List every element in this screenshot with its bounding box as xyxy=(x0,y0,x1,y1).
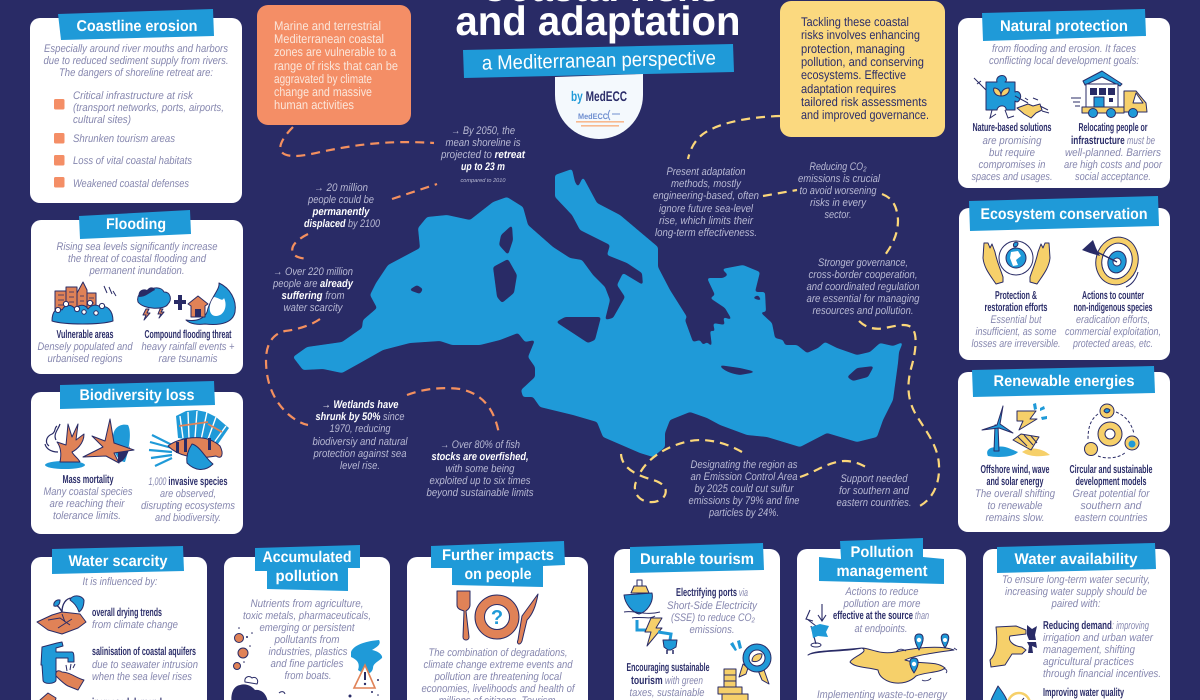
panel: water scarcity: It is influenced by: xyxy=(82,576,158,588)
dashed connectors: adaptation xyxy=(621,116,939,507)
panel: flooding: urbanised regions xyxy=(48,353,123,365)
annotation: support needed: for southern and xyxy=(839,485,910,497)
icon: wind, solar and bolt xyxy=(982,403,1050,457)
annotation: emission control area: by 2025 could cut sulfur xyxy=(694,483,795,495)
annotation: reducing CO2: emissions is crucial xyxy=(798,173,880,185)
annotation: water scarcity: → Over 220 million xyxy=(273,266,353,278)
icon: pollutant particles xyxy=(234,627,258,684)
panel: ecosystem conservation xyxy=(959,196,1170,360)
annotation: shoreline retreat xyxy=(440,125,526,184)
panel: water availability: Reducing demand: improving xyxy=(1043,620,1150,632)
panel: pollution management xyxy=(797,538,966,700)
annotation: wetlands: shrunk by 50% since xyxy=(316,411,404,423)
panel: ecosystem conservation: eradication efforts, xyxy=(1076,314,1150,326)
panel: accumulated pollution: pollutants from xyxy=(274,634,340,646)
intro box: risks: range of risks that can be xyxy=(274,59,398,73)
panel: water scarcity: Water scarcity xyxy=(68,553,168,570)
intro box: risks: aggravated by climate xyxy=(274,72,372,86)
panel: water availability: To ensure long-term water security, xyxy=(1002,574,1150,586)
panel: coastline erosion: Coastline erosion xyxy=(76,18,198,35)
panel: coastline erosion: Critical infrastructure at risk xyxy=(73,90,193,102)
byline badge: MedECC xyxy=(555,74,643,139)
annotation: governance xyxy=(806,257,920,317)
annotation: displaced people: people could be xyxy=(307,194,374,206)
map: Mediterranean sea xyxy=(293,169,903,457)
panel: water availability xyxy=(983,543,1170,700)
panel: natural protection: Nature-based solutions xyxy=(972,122,1052,134)
annotation: displaced people: → 20 million xyxy=(314,182,368,194)
panel: durable tourism: Short-Side Electricity xyxy=(667,600,758,612)
icon: eco medal and coins xyxy=(718,640,771,700)
intro box: adaptation: ecosystems. Effective xyxy=(801,68,906,82)
icon: compound flooding xyxy=(138,283,235,324)
panel: further impacts on people: The combination of degradations, xyxy=(428,647,568,659)
annotation: wetlands: level rise. xyxy=(340,460,380,472)
panel: coastline erosion: The dangers of shoreline retreat are: xyxy=(59,67,213,79)
annotation: support needed: Support needed xyxy=(840,473,908,485)
panel: water availability: Water availability xyxy=(1014,551,1138,568)
intro box: risks: Mediterranean coastal xyxy=(274,32,384,46)
panel: natural protection: Natural protection xyxy=(1000,18,1128,35)
icon: coral and starfish xyxy=(45,419,134,469)
panel: renewable energies: development models xyxy=(1076,476,1146,488)
panel: natural protection: are promising xyxy=(982,135,1042,147)
icon: plate, fork and knife xyxy=(457,591,538,644)
intro box: adaptation xyxy=(780,1,945,137)
intro box: adaptation: adaptation requires xyxy=(801,82,896,96)
panel: ecosystem conservation: insufficient, as some xyxy=(976,326,1056,338)
annotation: water scarcity xyxy=(272,266,354,314)
annotation: present adaptation: methods, mostly xyxy=(671,178,742,190)
intro box: risks xyxy=(257,5,411,125)
panel: coastline erosion: Weakened coastal defenses xyxy=(73,178,189,190)
annotation: fish stocks: with some being xyxy=(446,463,515,475)
panel: flooding: Compound flooding threat xyxy=(144,329,232,341)
panel: biodiversity loss: 1,000 invasive species xyxy=(148,476,228,488)
annotation: reducing CO2: to avoid worsening xyxy=(800,185,877,197)
panel: ecosystem conservation: Protection & xyxy=(995,290,1037,302)
icon: city crowd xyxy=(52,282,116,324)
panel: renewable energies: Circular and sustainable xyxy=(1070,464,1152,476)
annotation: fish stocks: beyond sustainable limits xyxy=(426,487,534,499)
icon: circular economy xyxy=(1084,404,1139,458)
annotation: reducing CO2 xyxy=(798,161,880,221)
annotation: wetlands: → Wetlands have xyxy=(322,399,398,411)
annotation: fish stocks: stocks are overfished, xyxy=(432,451,528,463)
annotation: water scarcity: people are already xyxy=(272,278,354,290)
panel: water scarcity: due to seawater intrusion xyxy=(92,659,198,671)
annotation: displaced people: displaced by 2100 xyxy=(304,218,381,230)
byline badge: MedECC: MedECC xyxy=(578,112,608,121)
panel: further impacts on people: Further impacts xyxy=(442,547,554,564)
panel: pollution management: Actions to reduce xyxy=(845,586,918,598)
panel: ecosystem conservation: losses are irreversible. xyxy=(972,338,1060,350)
panel: durable tourism: Durable tourism xyxy=(640,551,754,568)
dashed connectors: risks xyxy=(266,127,499,434)
panel: natural protection: social acceptance. xyxy=(1075,171,1151,183)
annotation: wetlands: 1970, reducing xyxy=(330,423,391,435)
panel: renewable energies: southern and xyxy=(1080,500,1142,512)
panel: water availability: management, shifting xyxy=(1043,644,1136,656)
panel: ecosystem conservation: protected areas, etc. xyxy=(1072,338,1153,350)
panel: further impacts on people: on people xyxy=(464,566,532,583)
intro box: adaptation: and improved governance. xyxy=(801,108,929,122)
panel: flooding xyxy=(31,210,243,374)
panel: flooding: permanent inundation. xyxy=(89,265,184,277)
intro box: adaptation: protection, managing xyxy=(801,42,905,56)
panel: further impacts on people: pollution are threatening local xyxy=(434,671,562,683)
icon: smoke cloud xyxy=(231,684,285,700)
panel: natural protection: are high costs and poor xyxy=(1064,159,1163,171)
annotation: shoreline retreat: → By 2050, the xyxy=(451,125,515,137)
icon: plate, fork and knife: ? xyxy=(491,607,503,629)
panel: durable tourism: (SSE) to reduce CO₂ xyxy=(671,612,756,624)
panel: accumulated pollution: from boats. xyxy=(284,670,332,682)
panel: natural protection: Relocating people or xyxy=(1078,122,1148,134)
annotation: present adaptation: long-term effectiveness. xyxy=(655,227,757,239)
annotation: present adaptation: ignore future sea-level xyxy=(659,203,753,215)
panel: natural protection: infrastructure must be xyxy=(1071,135,1155,147)
intro box: risks: Marine and terrestrial xyxy=(274,19,381,33)
panel: accumulated pollution: emerging or persistent xyxy=(260,622,355,634)
panel: renewable energies: to renewable xyxy=(988,500,1042,512)
annotation: water scarcity: water scarcity xyxy=(284,302,344,314)
panel: pollution management: pollution are more xyxy=(843,598,920,610)
panel: further impacts on people: climate change extreme events and xyxy=(424,659,573,671)
annotation: shoreline retreat: up to 23 m xyxy=(461,161,505,173)
panel: further impacts on people: economies, livelihoods and health of xyxy=(422,683,575,695)
icon: hands around globe xyxy=(983,241,1050,284)
panel: water scarcity: from climate change xyxy=(92,619,178,631)
panel: renewable energies xyxy=(958,366,1170,532)
panel: flooding: rare tsunamis xyxy=(158,353,218,365)
panel: accumulated pollution: toxic metals, pharmaceuticals, xyxy=(243,610,371,622)
annotation: shoreline retreat: compared to 2010 xyxy=(460,178,506,184)
panel: durable tourism: emissions. xyxy=(690,624,734,636)
panel: pollution management: effective at the source than xyxy=(833,610,929,622)
panel: natural protection: spaces and usages. xyxy=(972,171,1052,183)
panel: biodiversity loss: Mass mortality xyxy=(62,474,114,486)
panel: accumulated pollution: Accumulated xyxy=(262,549,352,566)
panel: renewable energies: remains slow. xyxy=(986,512,1044,524)
panel: renewable energies: Renewable energies xyxy=(994,373,1134,390)
panel: pollution management: Pollution xyxy=(850,544,914,561)
annotation: reducing CO2: risks in every xyxy=(810,197,867,209)
panel: water availability: paired with: xyxy=(1051,598,1100,610)
panel: renewable energies: Offshore wind, wave xyxy=(980,464,1050,476)
annotation: shoreline retreat: mean shoreline is xyxy=(446,137,521,149)
icon: hand pinching tap xyxy=(990,625,1037,667)
panel: natural protection: conflicting local development goals: xyxy=(989,55,1139,67)
annotation: present adaptation xyxy=(653,166,759,239)
panel: flooding: Vulnerable areas xyxy=(56,329,114,341)
byline badge: MedECC: by MedECC xyxy=(571,88,627,104)
panel: water scarcity: salinisation of coastal aquifers xyxy=(92,646,196,658)
panel: ecosystem conservation: Ecosystem conservation xyxy=(980,206,1148,223)
panel: durable tourism: Electrifying ports via xyxy=(676,587,748,599)
annotation: emission control area: emissions by 79% and fine xyxy=(688,495,800,507)
panel: water availability: through financial incentives. xyxy=(1043,668,1161,680)
icon: dry soil and plant xyxy=(37,596,86,634)
panel: flooding: the threat of coastal flooding and xyxy=(68,253,207,265)
panel: coastline erosion: Loss of vital coastal habitats xyxy=(73,155,192,167)
panel: flooding: Rising sea levels significantly increase xyxy=(56,241,218,253)
panel: accumulated pollution: and fine particles xyxy=(270,658,344,670)
panel: natural protection: well-planned. Barriers xyxy=(1065,147,1161,159)
panel: ecosystem conservation: commercial exploitation, xyxy=(1065,326,1161,338)
panel: further impacts on people xyxy=(407,541,588,700)
panel: renewable energies: and solar energy xyxy=(986,476,1044,488)
panel: renewable energies: The overall shifting xyxy=(975,488,1056,500)
panel: accumulated pollution: industries, plastics xyxy=(268,646,348,658)
panel: water scarcity: overall drying trends xyxy=(92,607,162,619)
annotation: governance: cross-border cooperation, xyxy=(808,269,918,281)
panel: coastline erosion: Especially around river mouths and harbors xyxy=(44,43,228,55)
panel: natural protection: but require xyxy=(989,147,1035,159)
icon: oil slick and hazard sign xyxy=(348,640,382,698)
icon: ship with plug xyxy=(624,580,677,654)
panel: pollution management: at endpoints. xyxy=(854,623,908,635)
panel: natural protection: compromises in xyxy=(978,159,1046,171)
panel: natural protection xyxy=(958,9,1170,188)
annotation: governance: resources and pollution. xyxy=(812,305,914,317)
panel: biodiversity loss: disrupting ecosystems xyxy=(141,500,235,512)
intro box: risks: human activities xyxy=(274,98,354,112)
annotation: present adaptation: engineering-based, often xyxy=(653,190,759,202)
panel: flooding: Densely populated and xyxy=(38,341,133,353)
panel: natural protection: from flooding and erosion. It faces xyxy=(992,43,1136,55)
annotation: present adaptation: Present adaptation xyxy=(666,166,746,178)
annotation: wetlands: biodiversiy and natural xyxy=(312,436,408,448)
panel: accumulated pollution: Nutrients from agriculture, xyxy=(250,598,364,610)
panel: coastline erosion xyxy=(30,9,242,203)
panel: coastline erosion: (transport networks, ports, airports, xyxy=(73,102,224,114)
annotation: shoreline retreat: projected to retreat xyxy=(440,149,526,161)
panel: biodiversity loss: are observed, xyxy=(160,488,216,500)
annotation: fish stocks: → Over 80% of fish xyxy=(440,439,520,451)
panel: biodiversity loss: tolerance limits. xyxy=(53,510,121,522)
intro box: risks: change and massive xyxy=(274,85,372,99)
panel: flooding: heavy rainfall events + xyxy=(142,341,235,353)
annotation: wetlands xyxy=(312,399,408,472)
panel: flooding: Flooding xyxy=(106,216,166,233)
panel: biodiversity loss: Biodiversity loss xyxy=(80,387,194,404)
panel: durable tourism: Encouraging sustainable xyxy=(626,662,710,674)
icon: lionfish xyxy=(149,410,229,470)
annotation: displaced people: permanently xyxy=(312,206,370,218)
panel: durable tourism: tourism with green xyxy=(631,675,703,687)
icon: puzzle with leaf xyxy=(974,75,1049,118)
icon: flag and arrows xyxy=(806,604,829,647)
panel: ecosystem conservation: restoration efforts xyxy=(984,302,1048,314)
intro box: adaptation: Tackling these coastal xyxy=(801,15,909,29)
annotation: water scarcity: suffering from xyxy=(282,290,344,302)
annotation: present adaptation: rise, which limits their xyxy=(659,215,754,227)
panel: biodiversity loss: are reaching their xyxy=(50,498,126,510)
panel: water availability: increasing water supply should be xyxy=(1005,586,1147,598)
annotation: fish stocks: exploited up to six times xyxy=(430,475,531,487)
panel: water scarcity xyxy=(31,546,207,700)
icon: coastal wedge xyxy=(40,693,56,700)
intro box: adaptation: pollution, and conserving xyxy=(801,55,924,69)
panel: water availability: Improving water quality xyxy=(1043,687,1124,699)
icon: target and arrow xyxy=(1082,232,1143,290)
panel: coastline erosion: Shrunken tourism areas xyxy=(73,133,175,145)
annotation: emission control area: an Emission Control Area xyxy=(690,471,798,483)
panel: water scarcity: when the sea level rises xyxy=(92,671,192,683)
panel: pollution management: management xyxy=(836,563,928,580)
panel: durable tourism xyxy=(614,543,780,700)
panel: biodiversity loss: Many coastal species xyxy=(44,486,133,498)
panel: accumulated pollution xyxy=(224,545,390,700)
icon: faucet and hand xyxy=(41,642,84,690)
subtitle banner: a Mediterranean perspective xyxy=(482,47,716,75)
annotation: support needed: eastern countries. xyxy=(836,497,912,509)
icon: water drops and gauge xyxy=(990,686,1030,700)
annotation: reducing CO2: Reducing CO₂ xyxy=(810,161,867,173)
panel: water availability: agricultural practices xyxy=(1043,656,1134,668)
panel: ecosystem conservation: Actions to counter xyxy=(1082,290,1144,302)
annotation: emission control area: particles by 24%. xyxy=(708,507,779,519)
intro box: adaptation: tailored risk assessments xyxy=(801,95,927,109)
panel: biodiversity loss: and biodiversity. xyxy=(155,512,221,524)
panel: water availability: irrigation and urban water xyxy=(1043,632,1154,644)
annotation: governance: and coordinated regulation xyxy=(806,281,920,293)
intro box: risks: zones are vulnerable to a xyxy=(274,45,396,59)
annotation: fish stocks xyxy=(426,439,534,499)
panel: coastline erosion: due to reduced sediment supply from rivers. xyxy=(44,55,228,67)
panel: biodiversity loss xyxy=(31,381,243,534)
icon: pollution spill with pins xyxy=(808,634,957,683)
annotation: emission control area: Designating the region as xyxy=(690,459,798,471)
icon: house on truck xyxy=(1071,71,1147,118)
annotation: reducing CO2: sector. xyxy=(824,209,852,221)
annotation: governance: Stronger governance, xyxy=(818,257,908,269)
annotation: wetlands: protection against sea xyxy=(313,448,406,460)
panel: coastline erosion: cultural sites) xyxy=(73,114,131,126)
intro box: adaptation: risks involves enhancing xyxy=(801,28,920,42)
annotation: support needed xyxy=(836,473,912,509)
annotation: governance: are essential for managing xyxy=(806,293,920,305)
panel: ecosystem conservation: Essential but xyxy=(990,314,1042,326)
panel: accumulated pollution: pollution xyxy=(276,568,338,585)
annotation: emission control area xyxy=(688,459,800,519)
panel: renewable energies: eastern countries xyxy=(1074,512,1148,524)
panel: renewable energies: Great potential for xyxy=(1072,488,1151,500)
panel: durable tourism: taxes, sustainable xyxy=(630,687,704,699)
annotation: displaced people xyxy=(304,182,381,230)
